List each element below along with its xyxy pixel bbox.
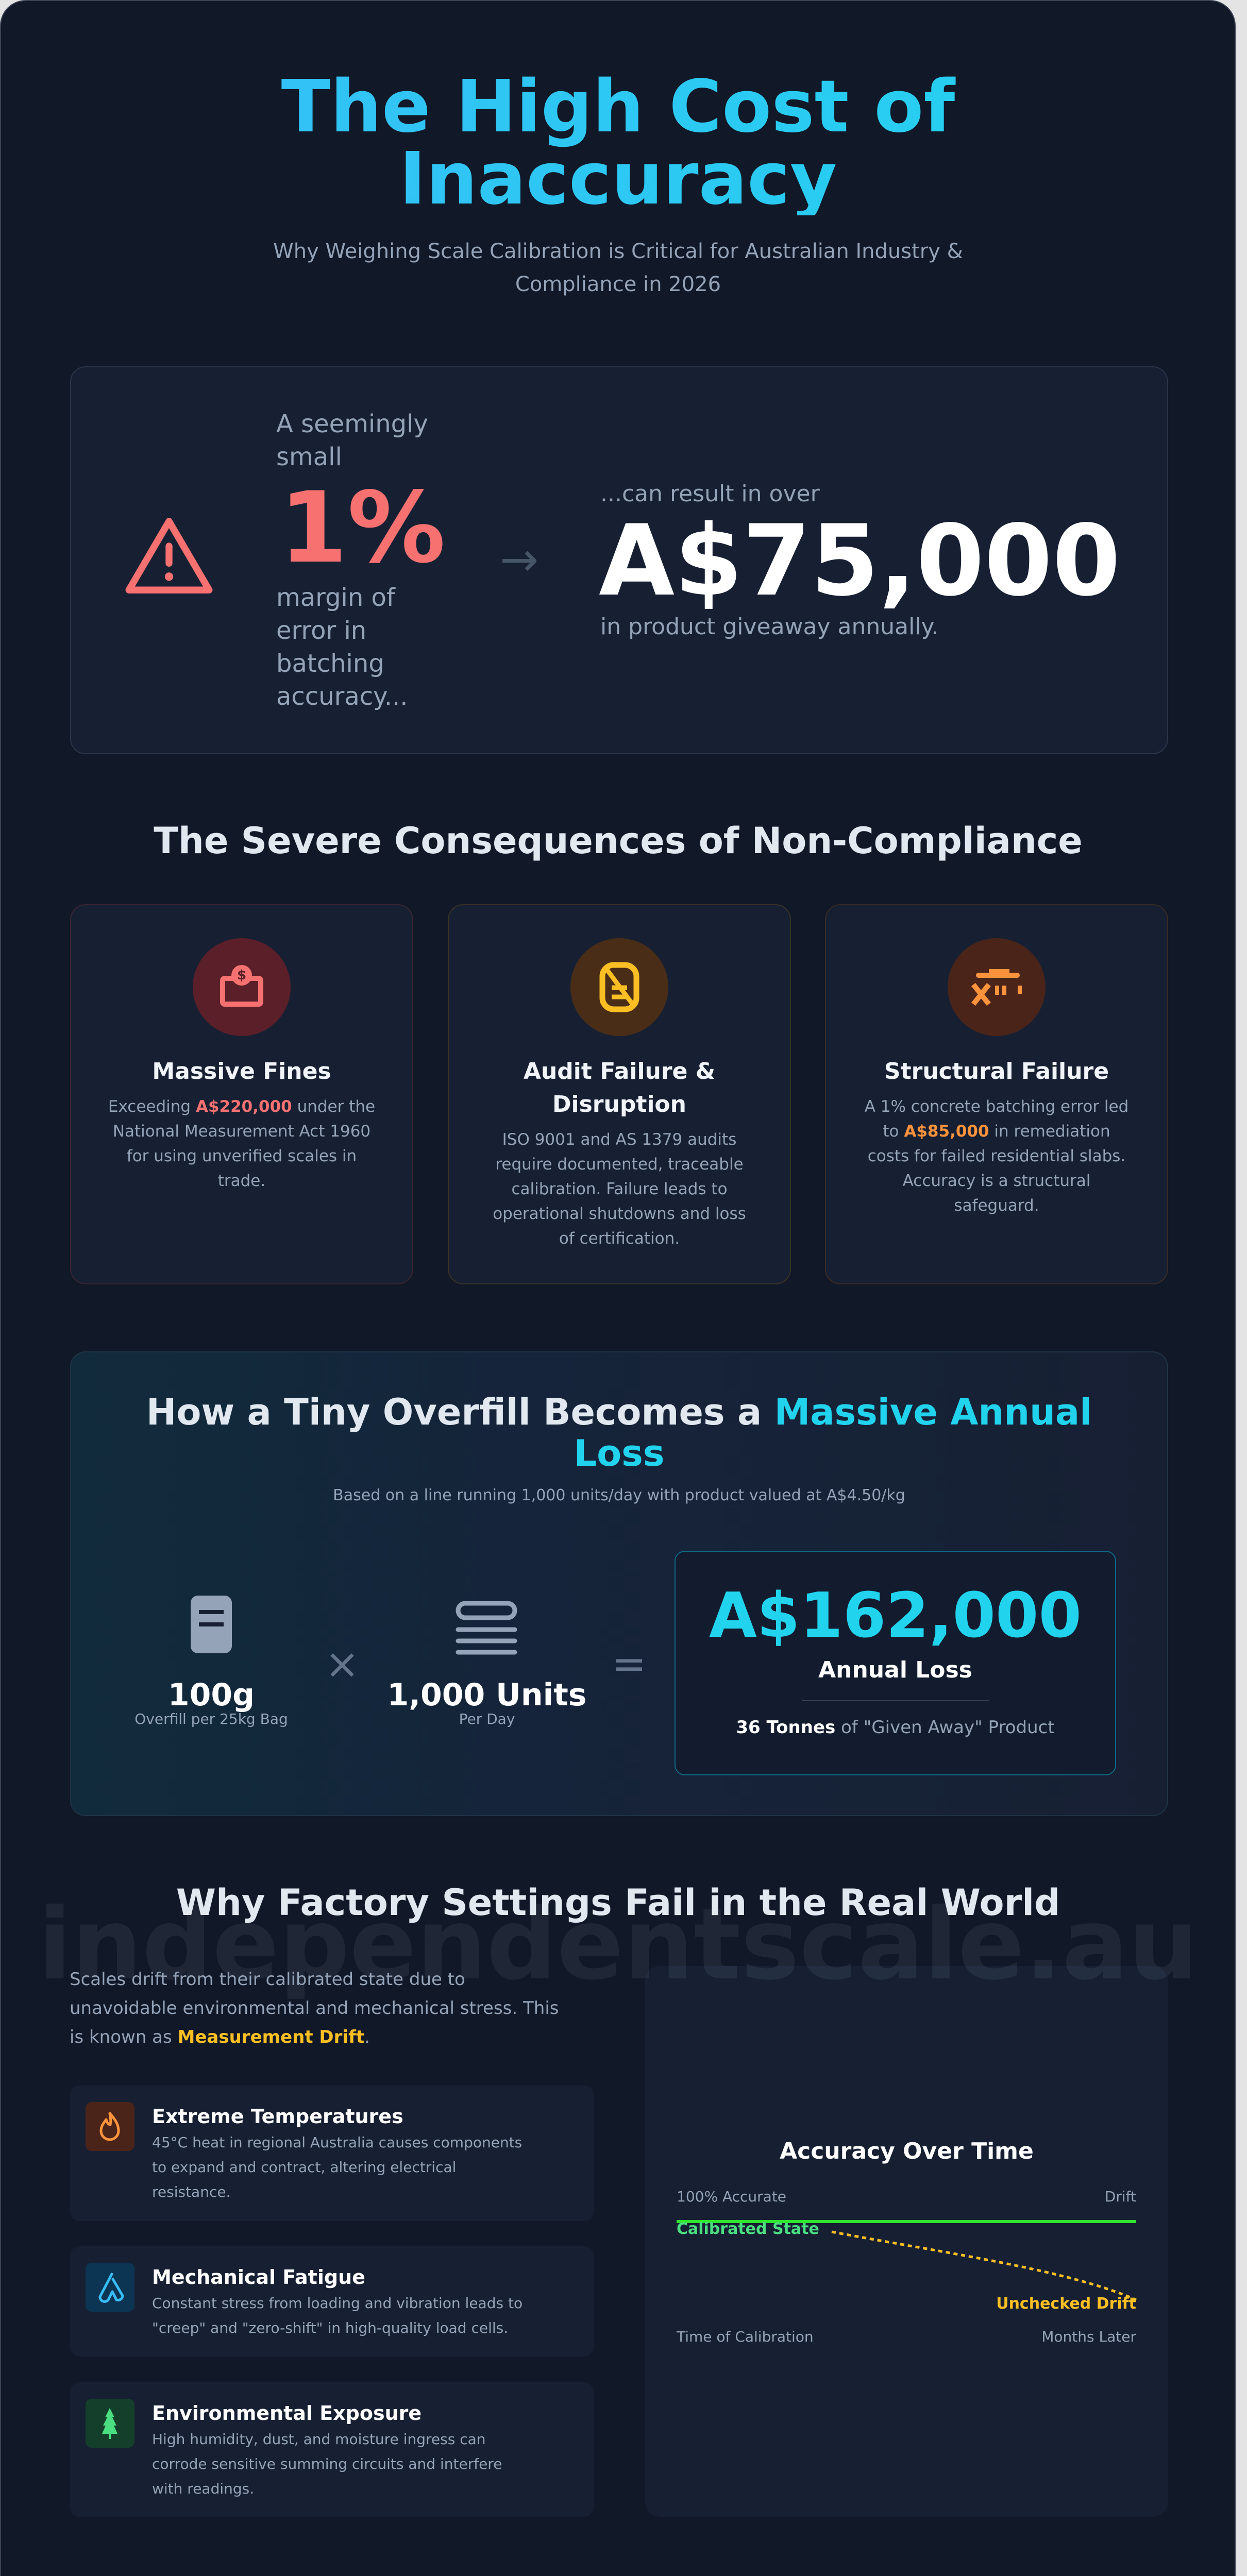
factor body: resistance. [152, 2183, 230, 2200]
heading: overfill [146, 1391, 1092, 1475]
text: margin of error: margin of [276, 583, 395, 612]
subtitle: Why Weighing Scale Calibration is Critical for Australian Industry & [273, 240, 963, 263]
title [1, 71, 1235, 215]
card title: Audit Failure & [524, 1058, 715, 1084]
card title: Disruption [552, 1091, 686, 1117]
text: product giveaway: in product giveaway annually. [600, 614, 938, 640]
stat: 1,000 units: 1,000 Units [387, 1677, 587, 1713]
icon: layers [456, 1601, 517, 1655]
panel: massive fines [70, 904, 413, 1284]
card body: operational shutdowns and loss [493, 1205, 746, 1223]
card body: require documented, traceable [495, 1155, 744, 1174]
panel: extreme temperatures [70, 2086, 594, 2221]
factor body: corrode sensitive summing circuits and interfere [152, 2455, 502, 2472]
subheading: Based on a line running 1,000 units/day with product valued at A$4.50/kg [333, 1486, 905, 1504]
text: seemingly small [276, 410, 428, 471]
icon: audit [570, 938, 668, 1036]
card title: Structural Failure [884, 1058, 1109, 1084]
text: margin of error: batching [276, 649, 384, 678]
factor body: High humidity, dust, and moisture ingress can [152, 2431, 485, 2448]
card body: trade. [218, 1172, 265, 1190]
title: Inaccuracy [399, 137, 837, 221]
text: seemingly small: A seemingly [276, 410, 428, 438]
stat: 100g: 100g [168, 1677, 255, 1713]
icon: strain [86, 2263, 134, 2312]
card body: of certification. [559, 1229, 680, 1248]
panel: overfill calculation [70, 1351, 1168, 1816]
chart title: Accuracy Over Time [780, 2138, 1034, 2164]
stat: 1%: 1% [279, 471, 446, 585]
factor body: with readings. [152, 2480, 254, 2497]
panel: environmental exposure [70, 2382, 594, 2517]
panel: hero stat [70, 366, 1168, 754]
stat: 100g: Overfill per 25kg Bag [134, 1710, 288, 1727]
card body: Accuracy is a structural [903, 1172, 1090, 1190]
chart: drift lines: Unchecked Drift [996, 2295, 1136, 2313]
card title [524, 1058, 715, 1117]
heading: overfill: Loss [574, 1432, 665, 1475]
chart: drift lines: Calibrated State [677, 2220, 819, 2238]
factor body [152, 2134, 522, 2200]
icon: tree [86, 2399, 134, 2448]
text: margin of error: accuracy... [276, 682, 408, 711]
panel: accuracy chart [645, 1966, 1168, 2517]
chart: drift lines: Time of Calibration [676, 2328, 814, 2345]
card body [108, 1097, 375, 1190]
factor body: "creep" and "zero-shift" in high-quality load cells. [152, 2319, 508, 2336]
text: margin of error [276, 583, 408, 711]
card body: costs for failed residential slabs. [868, 1147, 1125, 1165]
result box [675, 1551, 1116, 1775]
chart: drift lines: Months Later [1041, 2328, 1136, 2345]
intro text: drift [70, 1969, 559, 2047]
panel: structural failure [825, 904, 1168, 1284]
label: tonnes: 36 Tonnes of "Given Away" Product [736, 1717, 1055, 1738]
heading: consequences: The Severe Consequences of Non-Compliance [154, 820, 1083, 862]
card body: National Measurement Act 1960 [113, 1122, 370, 1141]
icon: structure [948, 938, 1046, 1036]
stat: A$75,000: A$75,000 [599, 504, 1120, 618]
panel: audit failure [448, 904, 791, 1284]
chart: drift lines: 100% Accurate [677, 2188, 786, 2205]
text: can result: ...can result in over [600, 481, 820, 507]
icon: flame [86, 2102, 134, 2151]
intro text: drift: is known as Measurement Drift. [70, 2027, 370, 2047]
label: annual loss: Annual Loss [818, 1657, 972, 1683]
icon: fines [193, 938, 291, 1036]
card body [865, 1097, 1128, 1215]
subtitle [273, 240, 963, 296]
intro text: drift: Scales drift from their calibrated state due to [70, 1969, 465, 1990]
panel: mechanical fatigue [70, 2246, 594, 2357]
icon: warning triangle [126, 518, 212, 594]
intro text: drift: unavoidable environmental and mechanical stress. This [70, 1998, 559, 2019]
chart: drift lines [676, 2188, 1137, 2345]
icon: bag [191, 1596, 232, 1653]
factor title: Environmental Exposure [152, 2402, 422, 2425]
card body [493, 1130, 746, 1248]
card body: ISO 9001 and AS 1379 audits [502, 1130, 736, 1149]
card body: safeguard. [954, 1196, 1039, 1215]
stat: 100g [134, 1677, 288, 1727]
factor body: to expand and contract, altering electrical [152, 2159, 456, 2176]
multiply sign: × [325, 1640, 360, 1688]
factor body: Constant stress from loading and vibration leads to [152, 2295, 523, 2312]
equals sign: = [612, 1640, 647, 1688]
card body: calibration. Failure leads to [511, 1180, 728, 1198]
card title: Massive Fines [152, 1058, 331, 1084]
subtitle: Compliance in 2026 [515, 273, 721, 296]
factor title: Extreme Temperatures [152, 2105, 403, 2128]
card body: Exceeding A$220,000 under the [108, 1097, 375, 1116]
stat: annual loss: A$162,000 [709, 1580, 1082, 1652]
chart: drift lines: Drift [1105, 2188, 1136, 2205]
factor body [152, 2295, 523, 2336]
heading: overfill: How a Tiny Overfill Becomes a Massive Annual [146, 1391, 1092, 1433]
watermark: independentscale.au [38, 1888, 1199, 2002]
factor body [152, 2431, 502, 2497]
factor body: 45°C heat in regional Australia causes components [152, 2134, 522, 2151]
title: The High Cost of [281, 65, 955, 149]
card body: A 1% concrete batching error led [865, 1097, 1128, 1116]
stat: 1,000 units: Per Day [459, 1710, 515, 1727]
factor title: Mechanical Fatigue [152, 2266, 365, 2289]
card body: for using unverified scales in [127, 1147, 357, 1165]
icon: fines: $ [237, 968, 246, 983]
arrow: → [500, 533, 538, 587]
text: seemingly small: small [276, 443, 342, 471]
card body: to A$85,000 in remediation [883, 1122, 1110, 1141]
heading: factory settings: Why Factory Settings Fail in the Real World [176, 1882, 1060, 1924]
text: margin of error: error in [276, 616, 366, 645]
